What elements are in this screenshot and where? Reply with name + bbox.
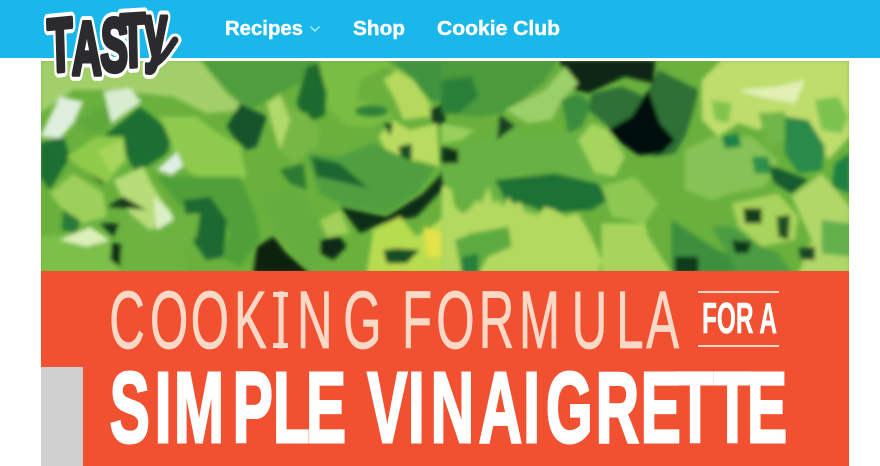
nav link: Recipes: Recipes (225, 18, 303, 40)
heading: for a (698, 291, 779, 347)
heading: Cooking Formula: COOKING FORMULA (109, 275, 679, 366)
photo: curly green lettuce (40, 60, 850, 273)
nav link: Shop: Shop (353, 18, 405, 40)
heading: Simple Vinaigrette: SIMPLE VINAIGRETTE (110, 352, 787, 464)
heading: for a: FOR A (702, 294, 777, 343)
nav link: Cookie Club: Cookie Club (437, 18, 560, 40)
title panel (41, 271, 849, 466)
navigation bar (0, 0, 880, 58)
grey side tab (41, 367, 83, 466)
icon: dropdown chevron (310, 26, 320, 31)
